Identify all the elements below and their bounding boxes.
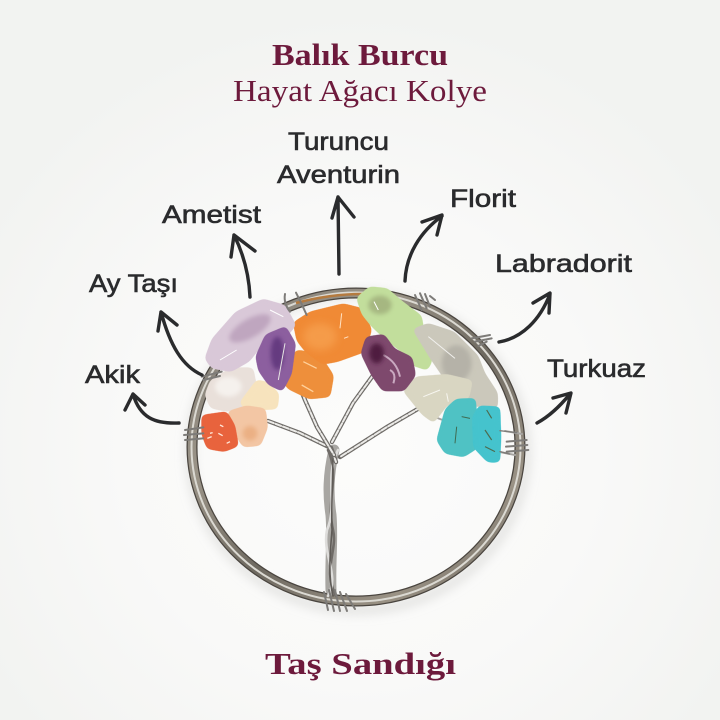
stone: dark amethyst bbox=[257, 328, 294, 389]
label: Turkuaz: Turkuaz bbox=[547, 355, 646, 383]
stone: orange aventurine large bbox=[295, 305, 370, 363]
arrow: Akik bbox=[125, 394, 179, 423]
stone: carnelian red bbox=[203, 413, 237, 450]
stone cluster bbox=[203, 288, 499, 461]
title: Balık Burcu bbox=[272, 37, 448, 72]
necklace pendant bbox=[184, 288, 528, 611]
label: Florit: Florit bbox=[450, 185, 516, 213]
stone: turquoise right bbox=[474, 407, 499, 461]
arrow: Labradorit bbox=[499, 293, 550, 342]
label: Akik: Akik bbox=[85, 361, 141, 389]
brand name: Taş Sandığı bbox=[265, 646, 456, 681]
label: Ametist: Ametist bbox=[162, 201, 261, 229]
label: Labradorit: Labradorit bbox=[495, 250, 632, 278]
stone: carnelian peach bbox=[229, 407, 266, 445]
label: Turuncu Aventurin bbox=[277, 128, 400, 189]
label: Turuncu Aventurin: Aventurin bbox=[277, 161, 400, 189]
tree branches bbox=[268, 368, 522, 462]
arrow: Turuncu Aventurin bbox=[332, 197, 354, 274]
stone: moonstone cream bbox=[242, 382, 277, 408]
pendant shadow bbox=[190, 294, 526, 610]
wire wraps bbox=[184, 293, 528, 454]
title bbox=[233, 37, 487, 108]
stone: labradorite upper bbox=[415, 325, 496, 407]
arrow: Ametist bbox=[231, 235, 255, 297]
arrow: Turkuaz bbox=[537, 393, 571, 423]
stone: plum amethyst bbox=[363, 336, 414, 389]
stone: turquoise left bbox=[438, 400, 477, 455]
stone: fluorite bbox=[358, 288, 431, 368]
bottom wire wrap bbox=[324, 590, 355, 611]
metal ring bbox=[192, 292, 520, 602]
stone: moonstone bbox=[207, 369, 255, 410]
stone: orange aventurine small bbox=[284, 352, 332, 397]
label: Turuncu Aventurin: Turuncu bbox=[288, 128, 389, 156]
stone: labradorite lower bbox=[405, 376, 471, 421]
stone: pale amethyst bbox=[207, 301, 294, 370]
label: Ay Taşı: Ay Taşı bbox=[89, 270, 178, 298]
arrow: Ay Taşı bbox=[158, 312, 202, 375]
arrow: Florit bbox=[405, 215, 442, 281]
title: Hayat Ağacı Kolye bbox=[233, 73, 487, 108]
tree trunk bbox=[326, 450, 338, 596]
